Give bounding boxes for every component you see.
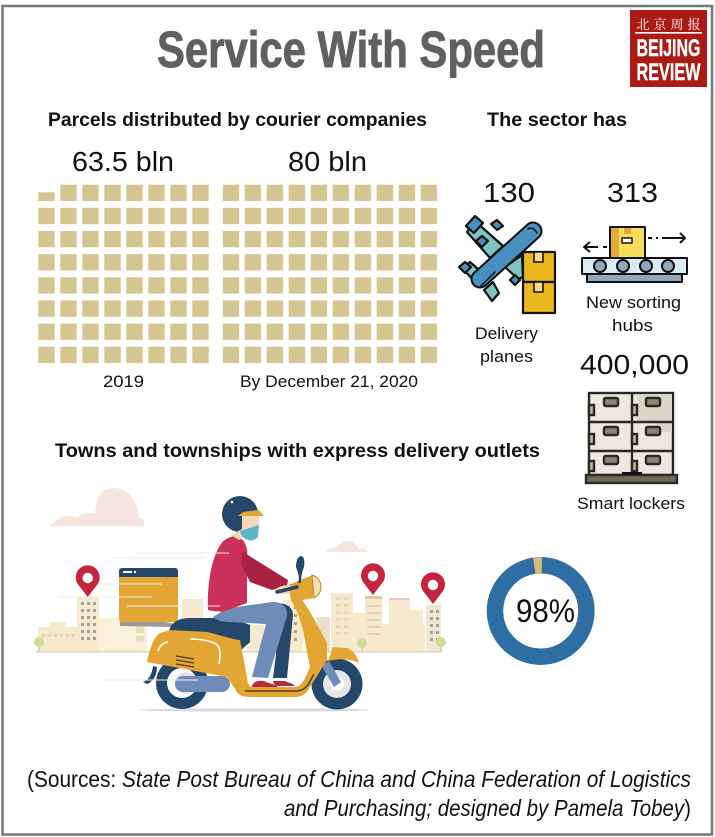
icon: plane with boxes — [459, 216, 555, 313]
heading: parcels: Parcels distributed by courier companies — [48, 110, 427, 131]
cloud left — [50, 488, 144, 526]
exhaust — [175, 676, 230, 692]
heading: towns: Towns and townships with express delivery outlets — [55, 441, 540, 462]
rider torso — [208, 536, 247, 612]
scooter body — [147, 575, 327, 697]
value: planes: 130 — [483, 177, 535, 208]
cloud right — [326, 541, 368, 552]
title: Service With Speed — [157, 21, 545, 78]
logo: Beijing Review: 北京周报 — [636, 14, 700, 33]
unit grid: 2019 — [37, 184, 214, 370]
ground line — [36, 651, 442, 653]
value: 2020 parcels: 80 bln — [288, 146, 367, 177]
icon: smart lockers — [586, 393, 677, 483]
icon: sorting conveyor — [582, 227, 687, 282]
label: December 2020: By December 21, 2020 — [240, 372, 418, 391]
label: sorting hubs: New sorting — [586, 293, 681, 312]
unit grid: 2020 — [223, 184, 443, 370]
rear mudguard — [143, 666, 157, 684]
label: sorting hubs — [586, 293, 681, 335]
rider arm — [241, 552, 288, 590]
front fork — [321, 661, 341, 687]
trees — [34, 637, 446, 652]
vents — [176, 656, 194, 667]
helmet — [222, 496, 258, 532]
face mask — [240, 525, 259, 540]
source note — [27, 766, 691, 821]
mirror — [296, 556, 304, 583]
map pin 1 — [76, 565, 100, 597]
label: delivery planes: Delivery — [475, 324, 539, 343]
label: delivery planes — [475, 324, 539, 366]
rear rack — [120, 621, 215, 641]
value: lockers: 400,000 — [580, 349, 689, 380]
value: hubs: 313 — [607, 177, 658, 208]
map pin 3 — [421, 572, 445, 604]
donut chart: 98%: 98% — [516, 593, 575, 629]
map pin 2 — [361, 563, 385, 595]
value: 2019 parcels: 63.5 bln — [72, 146, 174, 177]
label: smart lockers: Smart lockers — [577, 494, 685, 513]
scooter floor trim — [245, 674, 314, 691]
scooter headlight — [312, 575, 321, 598]
rear wheel — [156, 657, 208, 709]
rider back leg — [273, 603, 293, 678]
city skyline left — [38, 597, 330, 652]
label: sorting hubs: hubs — [612, 316, 653, 335]
rider front leg — [213, 602, 287, 678]
front wheel — [312, 658, 362, 710]
donut chart: 98% — [495, 557, 586, 657]
logo: Beijing Review — [630, 10, 707, 87]
rider neck and face — [231, 516, 259, 540]
speed lines — [59, 553, 229, 680]
ground shadow — [140, 708, 370, 712]
heading: sector: The sector has — [487, 110, 627, 131]
front fender — [328, 647, 359, 663]
visor — [238, 510, 264, 516]
city skyline right — [331, 593, 441, 652]
illustration: delivery scooter scene — [34, 488, 446, 712]
rear body shine and trim — [158, 639, 220, 664]
shoes — [252, 681, 295, 687]
hand and handlebar — [275, 585, 297, 594]
delivery box — [119, 568, 178, 622]
label: 2019: 2019 — [103, 372, 144, 391]
scooter seat — [169, 618, 250, 651]
label: delivery planes: planes — [480, 347, 533, 366]
